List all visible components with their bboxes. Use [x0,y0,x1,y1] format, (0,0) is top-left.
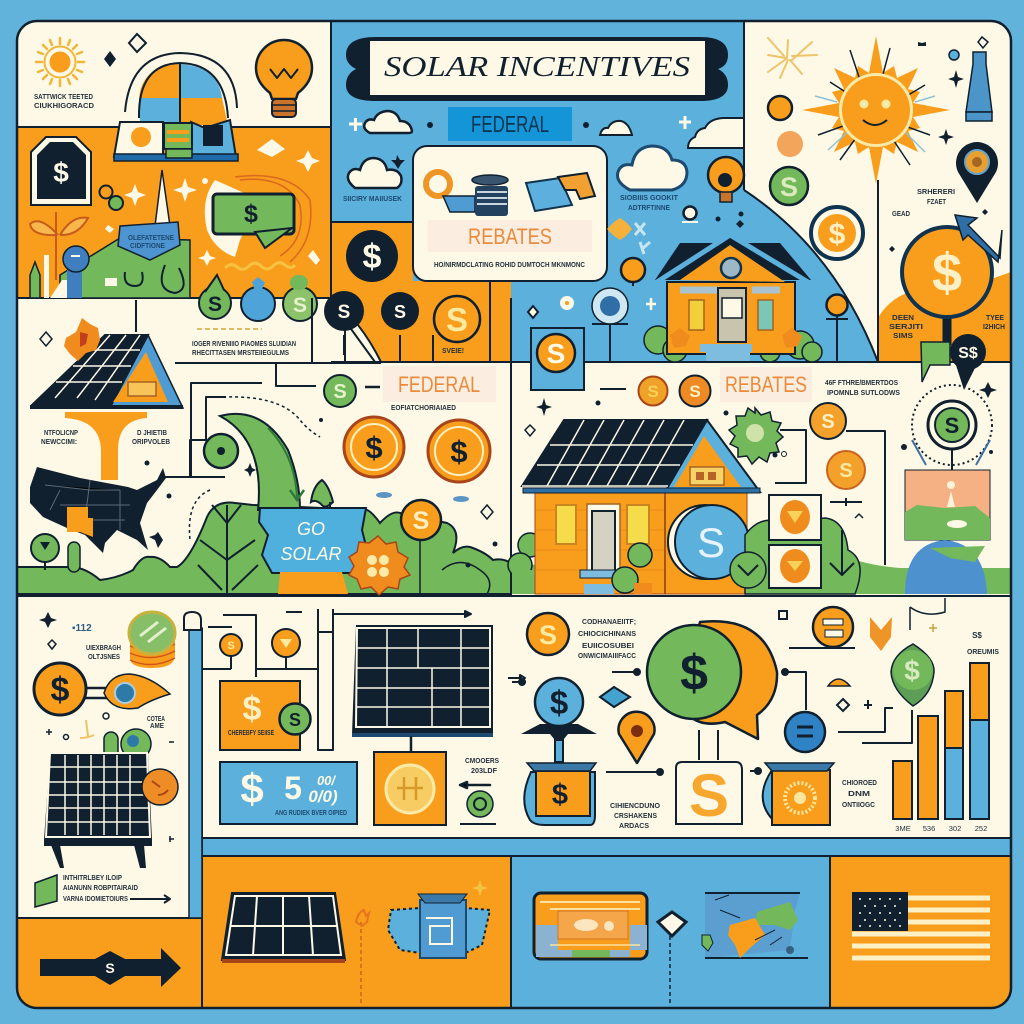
text: pot caption: CRSHAKENS [614,811,657,820]
icons: navy balloons: S [394,302,406,322]
icon: magnifier dollar [902,215,1002,345]
icon: small arc [828,679,850,686]
text: orange corner captions: DEEN [892,313,914,322]
text: rebates caption [825,378,900,397]
callout: blue badge [118,222,180,260]
card: orange dollar: S [289,710,301,730]
icon: green coin federal: S [333,381,347,403]
icon: large solar panel [352,625,493,752]
icon: orange coin upper right: S [539,620,557,650]
icon: jar with map [388,880,490,958]
bar chart: 252 [975,824,987,833]
icon: orange coin on stem: S [413,507,429,535]
row two right: top coins and label: REBATES [725,372,807,397]
icons: note and navy badge: S$ [958,345,978,362]
icon: green coin with orange speech: $ [680,645,708,701]
caption: OLTJSNES [88,652,120,661]
icon: dotted green seal [912,385,992,465]
coin pair: S [647,382,659,401]
text: roof captions right: D JHIETIB [137,428,167,437]
text: card caption: 203LDF [471,766,497,775]
text: top paragraph [192,329,296,357]
trees left [31,480,490,594]
text: roof captions right [132,428,170,446]
icon: lightbulb [256,40,312,117]
icon: coin with key [34,663,170,715]
icon: faded coin [777,131,803,157]
decoration: right panel stars [889,37,988,252]
picture: landscape [905,470,990,540]
text: small caption: COTEA [147,714,165,723]
icon: small coin one: S [227,640,235,652]
label: rebates [720,367,812,402]
card: blue 50 percent: ANG RUDIEK BVER OIPIED [275,808,347,817]
icons: navy balloons: S [338,302,350,323]
bushes [644,326,672,354]
icon: green spiky badge [729,408,783,464]
decoration: left row stars [40,332,498,548]
icon: american flag [852,892,990,958]
federal tab [448,107,572,141]
icons: note and navy badge [921,334,986,390]
icon: large solar house [508,420,760,594]
icon: orange dot [768,96,792,120]
title text: SOLAR INCENTIVES [384,51,691,83]
decoration: stars rebates row [525,382,997,458]
box: gem one [769,495,821,540]
text: pot caption: ARDACS [619,821,649,830]
text: cloud caption right: SIOBIIIS GOOKIT [620,193,678,202]
icon: globe [905,540,987,594]
icon: orange flower burst [349,536,410,595]
decoration: sparkles in blue [349,116,744,228]
icon: orange chevron [870,617,892,651]
icon: bulb on curve [708,157,744,202]
caption [86,643,121,661]
lower row: left column [34,612,178,907]
text: cloud caption left: SIICIRY MAIIUSEK [343,194,403,203]
panel: row three blue band [203,839,1010,855]
icon: blue diamond [600,687,630,707]
caption: UIEXBRAGH [86,643,121,652]
text: cloud caption right [620,193,678,212]
text: panel caption [63,873,138,903]
icon: pot with dollar: $ [552,779,568,811]
icon: green coin federal [324,375,356,407]
text: top paragraph: IOGER RIVENIIIO PIAOMES SLUIDIAN [192,339,296,348]
text: panel caption: AIANUNN ROBPITAIRAID [63,883,138,892]
text: sun pot caption [842,778,878,809]
text: card caption: CMOOERS [465,756,499,765]
text: roof captions right: ORIPVOLEB [132,437,170,446]
text: right panel captions [892,187,955,218]
icon: orange coin on stem [401,500,441,540]
icon: coin and stack [426,172,508,216]
text: sun caption: CIUKHIGORACD [34,101,95,110]
text: right panel captions: FZAET [927,197,946,206]
icon: navy dollar coin [346,230,398,282]
text: sun pot caption: DNM [848,789,870,798]
map: world [702,893,808,958]
federal tab: FEDERAL [471,111,549,137]
card: blue 50 percent: 5 [284,770,302,806]
icon: magnifier dollar: $ [932,243,962,303]
icon: small white bubble [682,206,698,222]
bar labels: 3ME [895,824,911,833]
icon: colourful card [534,893,647,959]
icon: cloud left lower [348,158,402,188]
text: orange corner captions: SIMS [893,331,913,340]
icon: orange coin upper right [527,613,569,655]
icon: globe on pole [592,288,628,362]
coin pair [638,376,710,406]
icon: bottom solar panel [222,893,345,963]
text: card caption [465,756,499,775]
text: roof captions left: NEWCCIMI: [41,437,77,446]
icon: green note [35,875,57,907]
icon: tower [155,170,170,226]
icon: coin with key: $ [51,671,70,709]
icon: small house [644,235,822,362]
panel: rebates card: REBATES [468,224,552,249]
text: sun caption: SATTWICK TEETED [34,92,93,101]
icon: small sun top left [36,38,84,86]
icon: money speech bubble: $ [244,200,258,228]
icon: link rings [100,186,123,210]
icon: coin beside panel [142,769,178,805]
panel: bottom blue middle [511,856,830,1008]
arrow: left pointing [460,782,490,788]
text: four line caption: EUIICOSUBEI [582,641,634,650]
small caption: HO/NIRMDCLATING ROHID DUMTOCH MKNMONC [434,260,585,269]
text: rebates caption: IPOMNLB SUTLODWS [827,388,900,397]
icon: federal coin one [344,417,404,477]
icon: big cloud [618,146,687,190]
decoration [46,713,174,842]
icon: dollar shield: $ [53,157,69,188]
text: right panel captions: SRHERERI [917,187,955,196]
text: pot caption: CIHIENCDUNO [610,801,660,810]
icon: dollar shield [31,137,91,205]
icon: gold coin with savings: SVEIE! [442,346,464,355]
sign: go solar: SOLAR [280,544,342,564]
icon: green dollar coin [770,167,808,205]
text: right panel captions: GEAD [892,209,910,218]
connectors lower right [512,598,945,775]
icon: blue coin: S [697,519,725,566]
bars [893,761,912,819]
icon: orange pin on stand [826,294,848,362]
panel: centre blue [331,21,878,362]
text: orange corner captions: TYEE [986,313,1004,322]
card: blue 50 percent: 0/0) [308,787,338,806]
icon: diamond with dashed line [658,912,686,1006]
icon: small green coin [460,791,496,824]
bar chart: 536 [923,824,935,833]
arrow: bottom left money: S [105,960,115,976]
card: orange seal [374,752,446,825]
text: orange corner captions [889,313,1005,340]
text: top paragraph: RHECITTASEN MRSTEIIEGULMS [192,348,289,357]
decoration: stars top left [104,34,146,67]
icon: solar panel with stand [44,753,152,868]
icon: green pin coin: $ [904,655,920,686]
icon: small coin two [272,629,300,657]
icon: coin stack [129,612,175,668]
panel: top left orange [17,127,331,298]
text: panel caption: INTHITRLBEY ILOIP [63,873,122,882]
icon: small coin one [220,634,242,656]
icon: green pin coin [891,644,934,706]
text: orange corner captions: I2HICH [983,322,1005,331]
rebates label [428,220,592,252]
icons: hanging drop coins: S [208,293,222,316]
icon: dashed line with flame [356,910,369,1006]
arrow: caption [130,895,170,903]
icon: green eye coin [204,434,238,468]
device base [114,122,163,157]
text: rebates caption: 46F FTHRE/BMERTDOS [825,378,898,387]
icon: orange star [607,218,632,240]
panel: centre orange block [331,222,511,362]
card: orange dollar: CHEREBFY SEIISE [228,728,274,737]
icon: green coin with orange speech [647,621,777,739]
icons: navy balloons [324,291,419,362]
arrow: bottom left money [40,948,181,987]
icon: money speech bubble [205,176,311,269]
callout: blue badge: CIDFTIONE [130,241,165,250]
text: four line caption [578,617,637,660]
text: sun pot caption: ONTIIOGC [842,800,876,809]
icon: orange pin [618,712,654,763]
ground: right green [532,561,1010,594]
icon: federal coin one: $ [365,430,383,465]
text: panel caption: VARNA IDOMIETOIURS [63,894,128,903]
icon: gold coins [810,403,865,489]
icon: green swoosh [220,414,304,510]
icon: ringed dollar coin [811,207,863,259]
icon: gold coins: S [821,411,835,433]
icon: plant behind panel [104,729,151,759]
bushes behind boxes [730,518,860,594]
connectors right row [775,430,952,565]
text: roof captions left [41,428,78,446]
decoration: pale crosses [635,223,650,254]
text: sun caption [34,92,95,110]
text: small caption [147,714,165,730]
icon: blue coin on stand [521,678,597,762]
text: pot caption [610,801,660,830]
pipe: blue [184,612,202,918]
text: four line caption: CHIOCICHINANS [578,629,636,638]
icon: pot with dollar [524,763,596,825]
icon: thin sun [768,38,817,78]
label: federal [383,366,496,402]
icon: big smiling sun [802,36,950,184]
text: small caption: AME [150,721,164,730]
icon: blue coin on stand: $ [550,684,568,721]
title banner [346,37,728,101]
text: federal caption: EOFIATCHORIAIAED [391,403,457,412]
map: united states [30,467,166,553]
icon: tickets [526,173,595,211]
panel: right orange corner [878,272,1011,362]
icon: ringed dollar coin: $ [829,218,846,251]
icon: plant and lamp scene [30,212,190,298]
panel: bottom orange middle [202,856,511,1008]
bar chart [893,631,999,833]
box: gem two [769,545,821,588]
icon: gold coin with savings: S [446,301,468,338]
callout: blue badge: OLEFATETENE [128,233,174,242]
text: four line caption: ONWICIMAIIIFACC [578,651,637,660]
label: federal: FEDERAL [398,372,480,397]
icon: cloud left upper [364,111,412,133]
decoration: sparkles on orange [97,139,320,266]
decoration stars [39,612,57,628]
panel: bottom orange right [830,856,1011,1008]
icon: federal coin two [428,420,490,482]
icon: pot with sun [763,763,834,825]
icon: federal coin two: $ [450,434,468,469]
bar chart: 302 [949,824,961,833]
lower row: centre connectors [202,609,525,750]
icon: orange balloon [621,258,645,286]
icon: blue coin [668,505,749,579]
bar chart: OREUMIS [967,647,999,656]
arrow on magnifier [955,215,1002,262]
icon: coin in blue square: S [547,338,565,369]
icons: hanging drop coins [199,275,317,321]
icon: green dollar coin: S [780,172,798,202]
icons: hanging drop coins: S [293,294,307,317]
icon: coin in blue square [531,328,584,390]
ground: left green bushes [17,503,511,594]
icon: map pin [956,142,998,203]
chart heading: S$ [972,631,982,640]
text: orange corner captions: SERJITI [889,322,923,331]
decoration: small items left of house [528,296,656,318]
icon: pie dome with device [114,53,238,161]
box: big S: S [689,762,729,829]
card: orange dollar [220,681,310,750]
icon: gold coins: S [839,460,853,482]
icon: blue coin lower [785,712,825,752]
panel: bottom orange left [17,918,202,1008]
coin pair: S [689,382,701,401]
icon: cloud at panel edge [688,118,744,148]
icon: rooftop solar house [30,318,183,480]
icon: gold coin with savings [433,296,490,362]
connectors left row [136,298,381,540]
icon: navy dollar coin: $ [363,238,382,276]
card: blue 50 percent [220,762,357,824]
icon: cloud right small [600,121,632,135]
icon: tower right [966,52,992,121]
text: four line caption: CODHANAEIITF; [582,617,636,626]
icon: dotted green seal: S [945,413,959,438]
text: cloud caption right: ADTRFTINNE [628,203,670,212]
sign: go solar [259,508,367,594]
icon: orange box coin [789,607,853,648]
decoration: diamond and cross [779,611,937,711]
card: blue 50 percent: 00/ [317,773,336,788]
small tag: ▪112 [72,623,92,634]
card: blue 50 percent: $ [240,765,264,812]
row two right: top coins and label [600,367,812,406]
card: orange dollar: $ [243,690,262,728]
text: sun pot caption: CHIOROED [842,778,878,787]
sign: go solar: GO [297,519,325,539]
panel: rebates card [413,146,607,281]
text: roof captions left: NTFOLICNP [44,428,78,437]
box: big S [676,762,742,829]
